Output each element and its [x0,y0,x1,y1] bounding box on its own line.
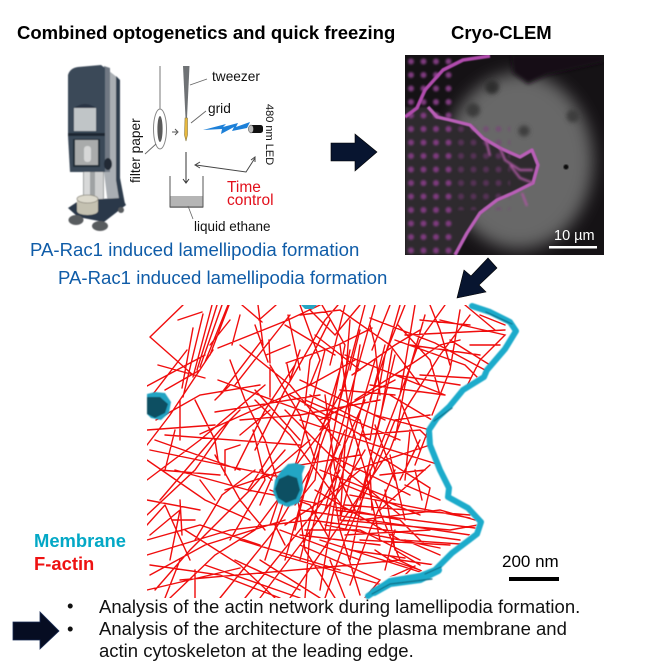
label: time control: Time [227,179,261,196]
text block: conclusions: Analysis of the architecture of the plasma membrane and [99,618,567,639]
icon: filter paper: filter paper [128,118,143,183]
icon: liquid ethane container [170,152,271,234]
legend: membrane and F-actin [34,530,126,574]
scale bar: 200 nm [502,552,559,581]
icon: filter paper [128,66,178,183]
scale bar: 200 nm: 200 nm [502,552,559,571]
legend: membrane and F-actin: F-actin [34,553,94,574]
text block: conclusions: actin cytoskeleton at the leading edge. [99,640,414,661]
icon: tweezer and grid: grid [208,101,231,116]
scale bar: 10 µm: 10 µm [554,228,595,244]
icon: membrane vesicle left [147,392,171,420]
label: time control [227,179,274,209]
icon: plunge freezer instrument [68,65,126,231]
arrow: time control bracket [195,157,255,172]
icon: membrane vesicle centre [273,463,305,507]
icon: blue light flash and LED: 480 nm LED [263,104,275,165]
chart: F-actin segmentation [147,305,505,598]
heading: PA-Rac1 second line: PA-Rac1 induced lamellipodia formation [58,267,387,288]
arrow: to conclusions [13,612,59,649]
icon: tweezer and grid [183,66,260,141]
icon: membrane vesicle top [301,305,317,309]
icon: tweezer and grid: tweezer [212,69,260,84]
chart: plasma membrane edge [368,306,516,596]
title: Cryo-CLEM: Cryo-CLEM [451,22,552,43]
scale bar: 10 µm [549,228,597,248]
text block: conclusions [67,595,580,661]
legend: membrane and F-actin: Membrane [34,530,126,551]
arrow: to cryo-CLEM [331,134,377,171]
icon: blue light flash and LED [203,104,275,165]
arrow: to tomogram [457,258,497,298]
text block: conclusions: Analysis of the actin network during lamellipodia formation. [99,596,580,617]
title: combined optogenetics and quick freezing: Combined optogenetics and quick freezing [17,22,395,43]
text block: conclusions: • [67,618,73,639]
icon: liquid ethane container: liquid ethane [194,219,271,234]
label: time control: control [227,192,274,209]
panel: cryo-CLEM micrograph [405,55,604,255]
text block: conclusions: • [67,595,73,616]
heading: PA-Rac1 first line: PA-Rac1 induced lamellipodia formation [30,239,359,260]
